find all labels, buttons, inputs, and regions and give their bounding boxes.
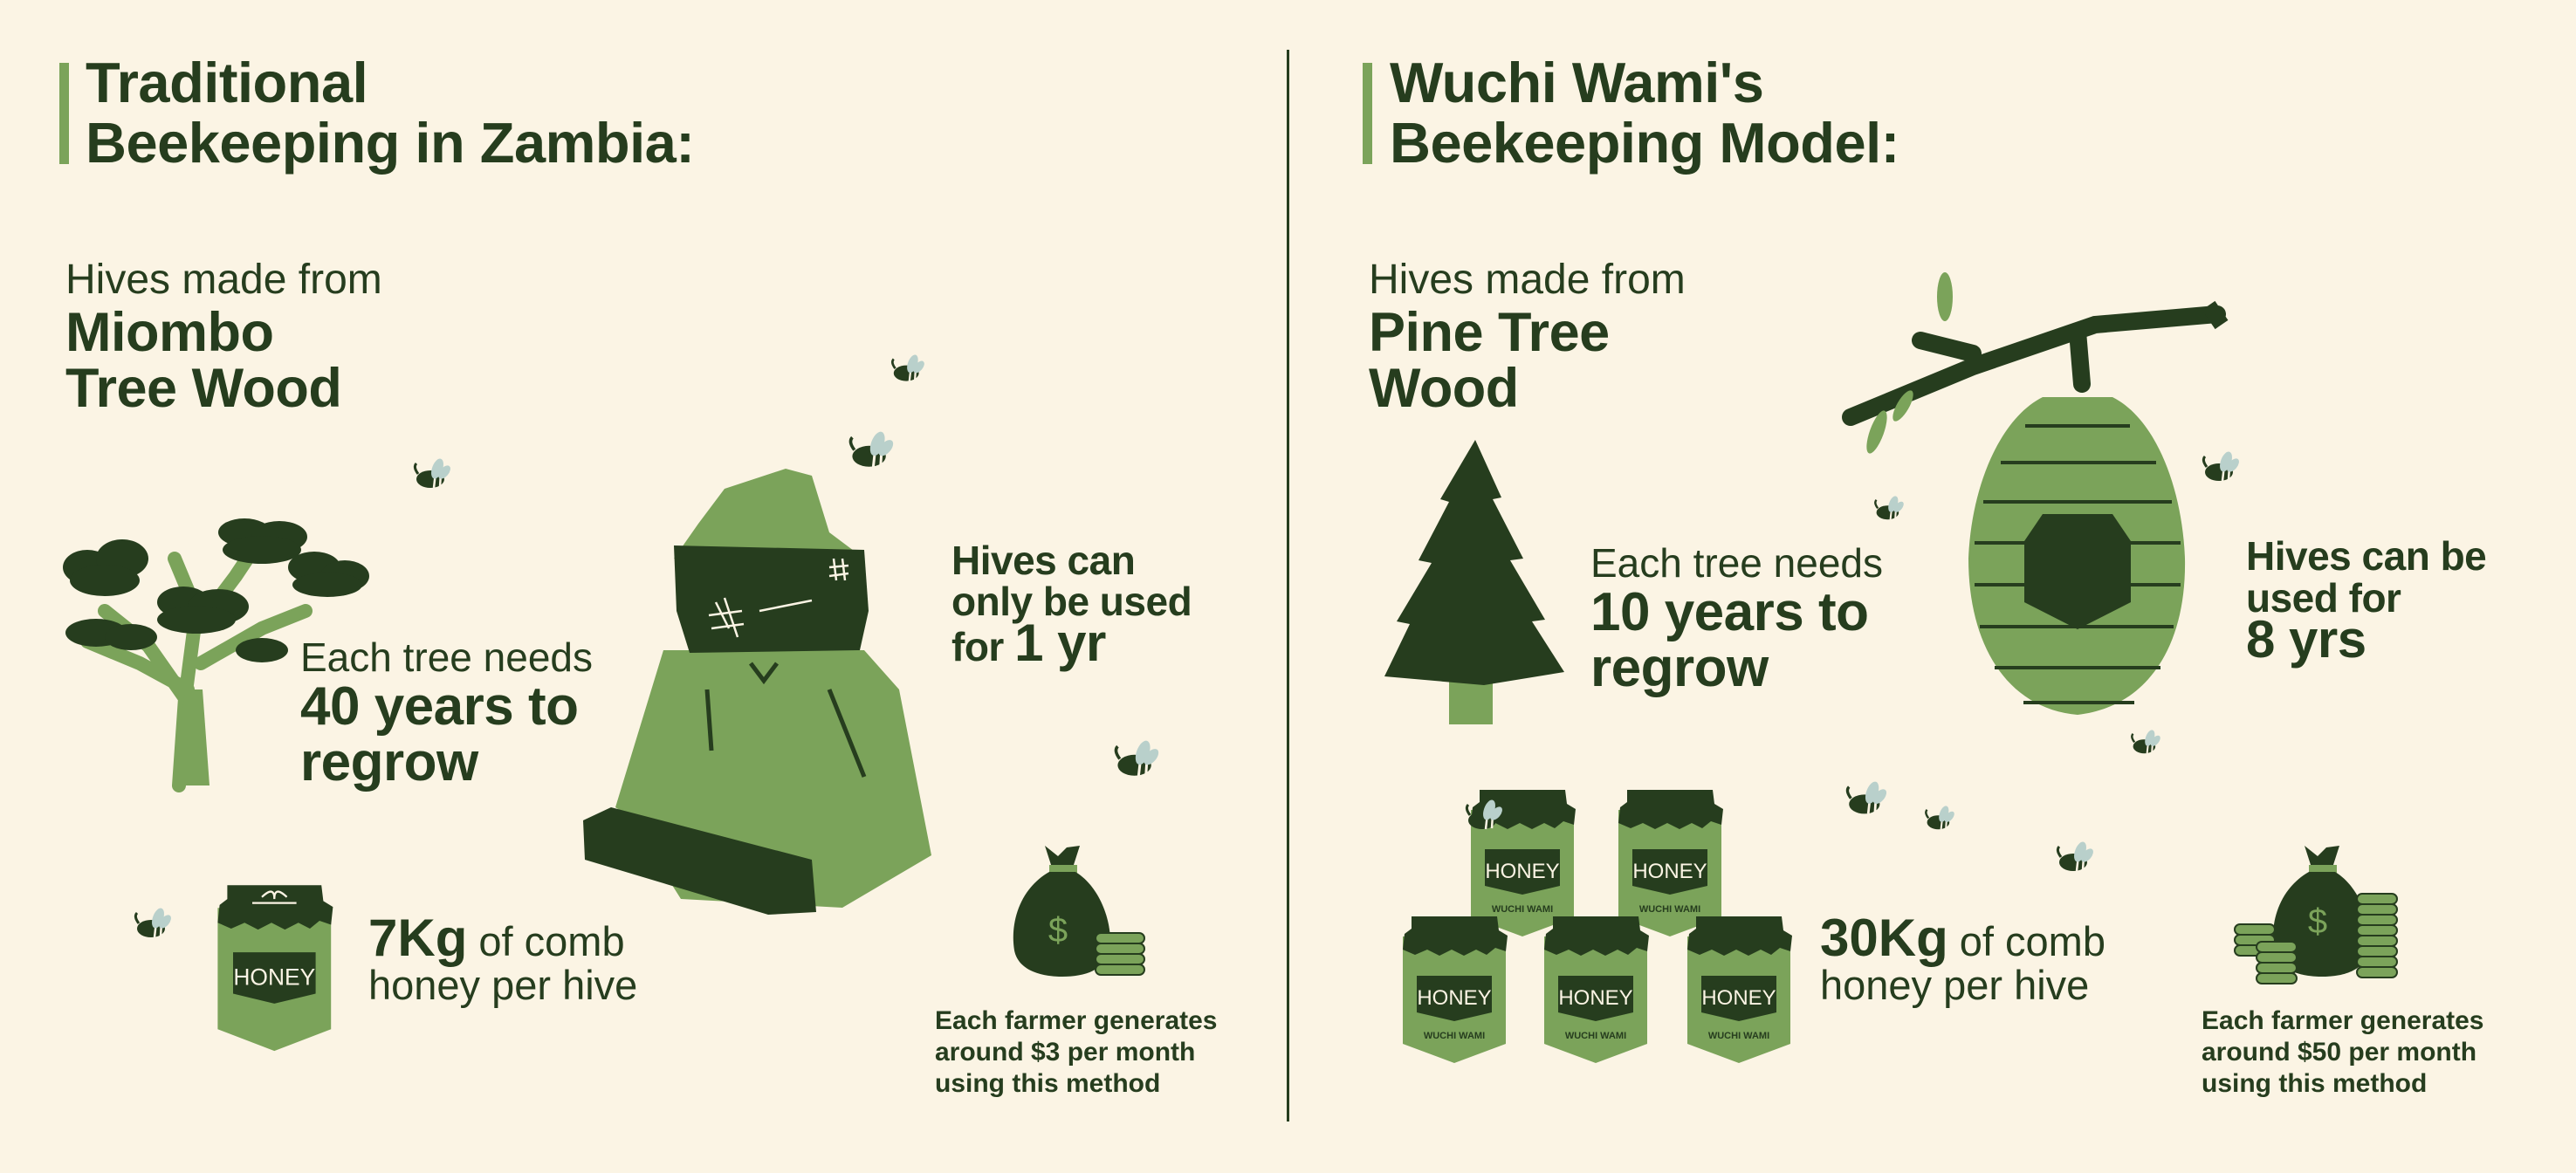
icon: right honey jars: WUCHI WAMI (1492, 904, 1553, 915)
text: $50 per month (2202, 1006, 2484, 1098)
icon: branch with hive (1851, 272, 2222, 715)
text: $3 per month: Each farmer generates (935, 1006, 1217, 1035)
icon: right honey jars: WUCHI WAMI (1639, 904, 1700, 915)
text: hives used 1 yr: only be used (951, 579, 1192, 624)
text: hives made from pine: Hives made from (1369, 257, 1686, 303)
text: hives used 1 yr (951, 538, 1192, 672)
icon: miombo tree (63, 518, 369, 785)
title left: Beekeeping in Zambia: (86, 111, 694, 175)
text: hives made from miombo (65, 257, 382, 419)
text: $3 per month (935, 1006, 1217, 1098)
accent bar right (1363, 63, 1372, 164)
text: hives made from miombo: Hives made from (65, 257, 382, 303)
text: each tree needs 40 years: regrow (300, 732, 478, 792)
text: 30kg: 30Kg of comb (1820, 909, 2105, 967)
text: $3 per month: around $3 per month (935, 1038, 1195, 1067)
text: hives made from pine (1369, 257, 1686, 419)
text: hives made from miombo: Miombo (65, 302, 273, 363)
text: 7kg (368, 909, 637, 1008)
text: each tree needs 40 years: 40 years to (300, 676, 578, 737)
text: hives made from miombo: Tree Wood (65, 358, 341, 419)
text: each tree needs 10 years (1590, 540, 1883, 698)
icon: right money bag with coins: $ (2308, 902, 2327, 941)
icon: left honey jar: HONEY (233, 964, 315, 990)
icon: right honey jars: WUCHI WAMI (1565, 1031, 1626, 1041)
icon: left money bag: $ (1048, 911, 1068, 950)
icon: right honey jars: HONEY (1558, 986, 1633, 1010)
divider (1287, 50, 1289, 1122)
title right: Wuchi Wami's (1390, 51, 1763, 114)
text: hives used 8 yrs: Hives can be (2246, 533, 2486, 579)
text: hives used 8 yrs (2246, 533, 2486, 669)
title right: Beekeeping Model: (1390, 111, 1899, 175)
icon: beekeeper (583, 469, 931, 915)
icon: right honey jars: HONEY (1632, 860, 1707, 883)
icon: right money bag with coins (2235, 846, 2397, 984)
icon: right honey jars: HONEY (1485, 860, 1560, 883)
text: hives made from pine: Pine Tree (1369, 302, 1610, 363)
title right (1390, 51, 1899, 175)
text: $50 per month: around $50 per month (2202, 1038, 2476, 1067)
text: hives used 1 yr: Hives can (951, 538, 1135, 583)
text: $50 per month: using this method (2202, 1069, 2427, 1098)
title left (86, 51, 694, 175)
icon: right honey jars: WUCHI WAMI (1424, 1031, 1485, 1041)
text: $50 per month: Each farmer generates (2202, 1006, 2484, 1035)
icon: right honey jars: HONEY (1701, 986, 1776, 1010)
icon: right honey jars (1403, 790, 1792, 1063)
text: hives used 8 yrs: 8 yrs (2246, 610, 2366, 669)
icon: left honey jar (217, 885, 333, 1051)
text: 7kg: 7Kg of comb (368, 909, 625, 967)
text: 30kg: honey per hive (1820, 962, 2089, 1008)
accent bar left (59, 63, 69, 164)
icon: pine tree (1384, 440, 1564, 724)
text: each tree needs 10 years: Each tree needs (1590, 540, 1883, 586)
text: hives used 8 yrs: used for (2246, 575, 2401, 621)
text: $3 per month: using this method (935, 1069, 1160, 1098)
text: hives made from pine: Wood (1369, 358, 1519, 419)
title left: Traditional (86, 51, 368, 114)
text: each tree needs 10 years: regrow (1590, 638, 1769, 698)
text: each tree needs 10 years: 10 years to (1590, 582, 1868, 642)
text: 30kg (1820, 909, 2105, 1008)
icon: left money bag (1013, 846, 1144, 977)
icon: right honey jars: WUCHI WAMI (1708, 1031, 1769, 1041)
text: each tree needs 40 years: Each tree needs (300, 635, 593, 680)
icon: right honey jars: HONEY (1417, 986, 1492, 1010)
text: 7kg: honey per hive (368, 962, 637, 1008)
icon: bees (135, 353, 2242, 937)
text: hives used 1 yr: for 1 yr (951, 614, 1106, 672)
text: each tree needs 40 years (300, 635, 593, 792)
